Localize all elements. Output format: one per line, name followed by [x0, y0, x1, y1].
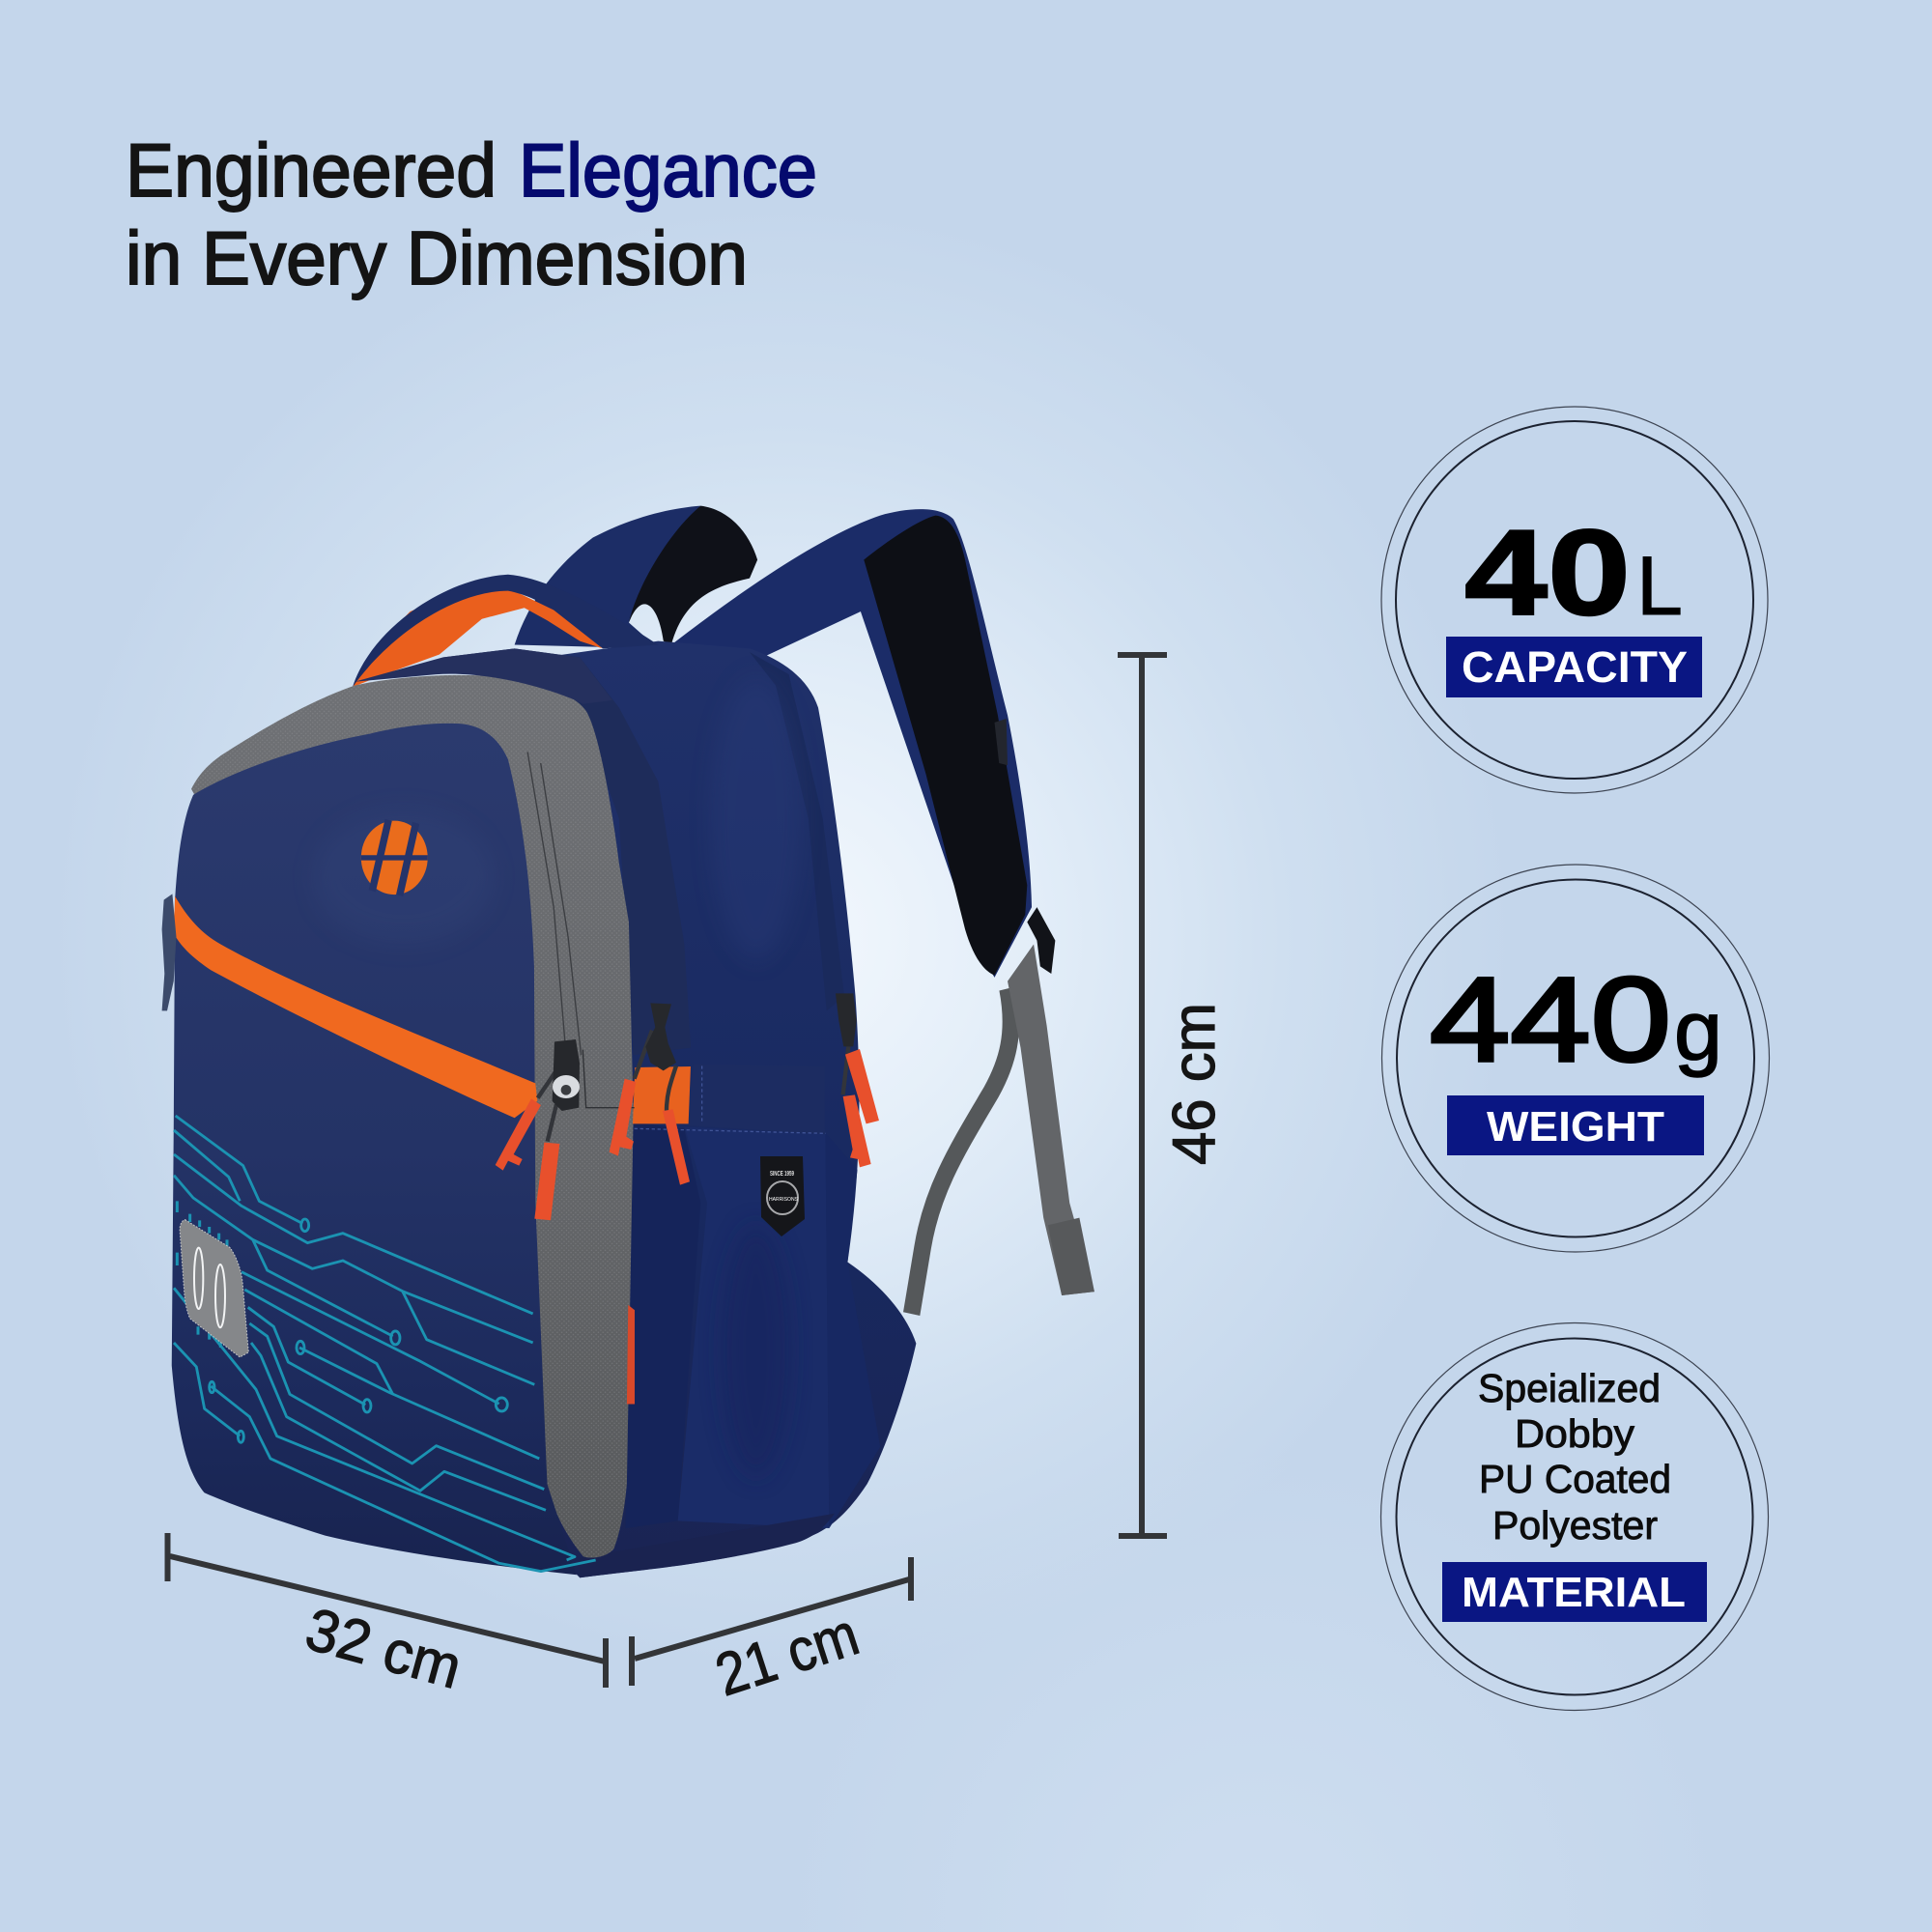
material description: Dobby — [1515, 1411, 1635, 1456]
material label — [1442, 1562, 1707, 1622]
strap buckle — [1027, 907, 1055, 974]
gray reflective patch — [180, 1220, 248, 1357]
title: in Every Dimension — [126, 215, 748, 300]
capacity label — [1446, 637, 1702, 697]
brand shield label: SINCE 1959 — [770, 1171, 794, 1178]
left zipper pull — [162, 894, 176, 1010]
capacity value — [1464, 504, 1683, 640]
strap webbing — [912, 944, 1094, 1314]
slider centre — [561, 1085, 571, 1095]
orange zipper pulls — [496, 1049, 879, 1220]
weight value — [1430, 953, 1722, 1087]
gray side mesh panel — [191, 675, 634, 1558]
backpack — [162, 506, 1094, 1577]
front panel — [172, 724, 577, 1575]
orange front zipper — [174, 896, 537, 1118]
title: Elegance — [519, 128, 817, 213]
dimension: depth 21 cm: 21 cm — [708, 1601, 867, 1709]
dimension: depth 21 cm — [632, 1557, 911, 1709]
pocket stitching — [635, 1065, 826, 1133]
dimension: height 46 cm: 46 cm — [1161, 1003, 1228, 1165]
material description: Speialized — [1478, 1366, 1661, 1410]
dimension: height 46 cm — [1118, 655, 1228, 1536]
top handle navy — [353, 575, 658, 687]
stat badge: capacity — [1381, 407, 1768, 793]
brand shield label — [760, 1156, 805, 1236]
main compartment band — [442, 648, 691, 1055]
material description: Polyester — [1492, 1503, 1658, 1548]
lower side pocket fold — [626, 1122, 880, 1528]
weight value: g — [1674, 984, 1722, 1078]
dimension: width 32 cm: 32 cm — [298, 1596, 469, 1702]
weight label: WEIGHT — [1487, 1103, 1664, 1151]
zipper hardware and pulls — [496, 993, 879, 1220]
zipper cords — [538, 1031, 848, 1142]
stat badge: material — [1381, 1323, 1768, 1710]
stat badge: weight — [1381, 865, 1770, 1252]
silver slider — [553, 1075, 580, 1098]
capacity value: 40 — [1464, 504, 1631, 640]
top handle orange lining — [353, 588, 603, 687]
rear shoulder strap — [515, 506, 757, 648]
side panel — [489, 641, 916, 1577]
capacity label: CAPACITY — [1462, 642, 1688, 692]
top dark seam — [355, 648, 612, 704]
side soft highlight — [710, 678, 802, 959]
material description — [1478, 1366, 1671, 1548]
title: Engineered — [126, 128, 497, 213]
orange webbing loop — [633, 1066, 691, 1123]
front shoulder strap — [665, 509, 1032, 978]
title — [126, 128, 817, 300]
side zipper band — [750, 652, 844, 1010]
weight label — [1447, 1095, 1704, 1155]
capacity value: L — [1636, 540, 1683, 633]
brand shield label: HARRISONS — [769, 1197, 799, 1203]
front panel highlight — [312, 811, 495, 944]
side pocket flap — [684, 1064, 825, 1134]
material description: PU Coated — [1479, 1457, 1671, 1501]
dimension: width 32 cm — [168, 1533, 606, 1702]
side red tag — [627, 1305, 635, 1404]
material label: MATERIAL — [1462, 1569, 1686, 1616]
mesh pocket seam — [582, 1050, 635, 1108]
bottom base — [580, 1514, 835, 1577]
zipper heads — [553, 993, 857, 1111]
brand logo — [361, 820, 428, 895]
circuit lines — [174, 1116, 596, 1572]
weight value: 440 — [1430, 953, 1671, 1087]
